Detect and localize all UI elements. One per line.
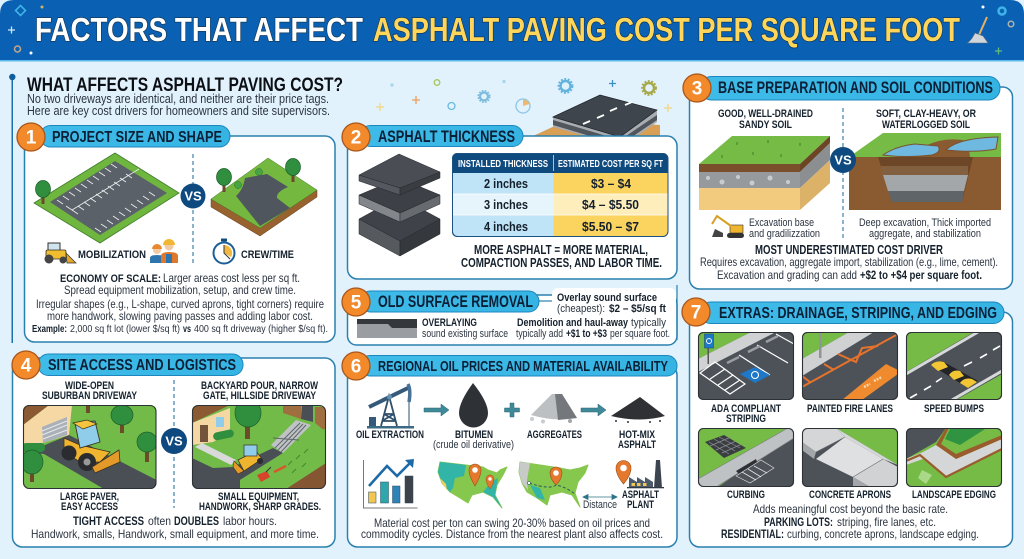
overlay price note xyxy=(557,292,666,315)
cost table: $5.50 – $7 xyxy=(582,219,639,234)
icon: excavator xyxy=(712,216,744,238)
road cutaway illustration xyxy=(533,95,660,146)
overlay price note: $2 – $5/sq ft xyxy=(609,303,666,315)
intro text xyxy=(27,91,330,118)
open driveway heading: WIDE-OPEN xyxy=(65,380,114,392)
bad soil heading: SOFT, CLAY-HEAVY, OR xyxy=(876,108,976,120)
access note: DOUBLES xyxy=(174,514,219,528)
icon: broom xyxy=(967,17,988,43)
open driveway heading xyxy=(42,380,138,402)
overlaying label: OVERLAYING xyxy=(422,317,477,329)
tile: landscape edging xyxy=(906,428,1002,501)
good soil heading xyxy=(718,108,813,131)
header decorations xyxy=(8,6,1014,54)
heading: extras xyxy=(682,298,1004,326)
label: aggregates: AGGREGATES xyxy=(527,429,582,441)
tight access heading: GATE, HILLSIDE DRIVEWAY xyxy=(203,390,317,402)
economy of scale text: Spread equipment mobilization, setup, and crew time. xyxy=(64,283,296,297)
cost table: ESTIMATED COST PER SQ FT xyxy=(558,159,663,170)
tight access heading: BACKYARD POUR, NARROW xyxy=(201,380,318,392)
label: asphalt plant xyxy=(622,489,659,511)
heading: base preparation xyxy=(683,74,1000,102)
cost table: $3 – $4 xyxy=(591,176,632,191)
thickness takeaway: COMPACTION PASSES, AND LABOR TIME. xyxy=(461,255,662,270)
panel 4: site access and logistics xyxy=(12,351,335,547)
extras note: PARKING LOTS: xyxy=(764,515,833,529)
cost table xyxy=(452,153,668,237)
illustration: large parking lot xyxy=(34,153,179,243)
access note: labor hours. xyxy=(223,514,277,528)
heading: site access: SITE ACCESS AND LOGISTICS xyxy=(48,357,236,374)
tile: fire lanes xyxy=(802,332,898,415)
illustration: overlay cross-section xyxy=(357,319,417,338)
label: landscape edging: LANDSCAPE EDGING xyxy=(912,489,996,501)
access note: Handwork, smalls, Handwork, small equipment, and more time. xyxy=(31,527,319,541)
cost driver note: Excavation and grading can add xyxy=(717,268,857,282)
cost table: INSTALLED THICKNESS xyxy=(458,159,548,170)
label: distance: Distance xyxy=(583,499,617,511)
bad soil heading: WATERLOGGED SOIL xyxy=(882,119,970,131)
header banner xyxy=(0,0,1024,62)
heading: site access: 4 xyxy=(21,356,32,376)
icon: stopwatch xyxy=(214,238,234,264)
extras note: RESIDENTIAL: xyxy=(721,527,784,541)
icon: aggregates pile xyxy=(530,394,577,424)
good soil caption: Excavation base xyxy=(749,217,814,229)
intro block xyxy=(27,75,343,118)
illustration: waterlogged soil pit xyxy=(849,133,1001,210)
vs divider: VS xyxy=(834,153,852,168)
label: speed bumps: SPEED BUMPS xyxy=(924,403,984,415)
heading: asphalt thickness xyxy=(342,123,523,151)
label: hot-mix asphalt: ASPHALT xyxy=(618,439,656,451)
illustration: asphalt layers xyxy=(359,154,440,256)
demolition note: typically add xyxy=(516,328,563,340)
material cost note xyxy=(361,516,663,541)
map: regional prices xyxy=(438,462,507,508)
overlaying label: sound existing surface xyxy=(422,328,508,340)
tile: speed bumps xyxy=(906,332,1002,415)
panel 2: asphalt thickness xyxy=(342,123,677,279)
label: hot-mix asphalt: HOT-MIX xyxy=(619,429,656,441)
vs divider: VS xyxy=(184,188,202,204)
extras note: curbing, concrete aprons, landscape edging. xyxy=(787,527,979,541)
bad soil caption: aggregate, and stabilization xyxy=(869,228,981,240)
heading: regional oil prices: 6 xyxy=(351,356,361,378)
panel 5: old surface removal xyxy=(342,285,677,345)
icon: hot-mix pile xyxy=(611,397,665,423)
illustration: well-drained soil block xyxy=(699,136,830,210)
icon: loader xyxy=(44,243,76,264)
heading: regional oil prices xyxy=(342,352,677,380)
bad soil caption: Deep excavation, Thick imported xyxy=(859,217,991,229)
cost table: 3 inches xyxy=(484,197,528,212)
title xyxy=(35,11,960,48)
economy of scale text: ECONOMY OF SCALE: xyxy=(60,273,161,285)
background decorations xyxy=(376,79,672,113)
economy of scale text: vs xyxy=(183,324,191,335)
label: curbing: CURBING xyxy=(727,489,765,501)
economy of scale text xyxy=(32,271,328,335)
panel 6: regional oil prices and material availability xyxy=(342,352,677,547)
icon: plus xyxy=(504,403,520,417)
panel 1: project size and shape xyxy=(17,123,335,342)
heading: project size xyxy=(17,123,230,151)
access note: often xyxy=(148,514,171,528)
overlay price note: Overlay sound surface xyxy=(557,292,657,304)
demolition note xyxy=(516,317,670,340)
access note xyxy=(31,514,319,541)
access note: TIGHT ACCESS xyxy=(73,514,144,528)
label: hot-mix asphalt xyxy=(618,429,656,451)
bad soil caption xyxy=(859,217,991,240)
extras note: Adds meaningful cost beyond the basic rate. xyxy=(753,502,948,516)
thickness takeaway: MORE ASPHALT = MORE MATERIAL, xyxy=(474,242,648,257)
tight access caption: SMALL EQUIPMENT, xyxy=(218,491,299,503)
label: bitumen: BITUMEN xyxy=(455,429,493,441)
good soil caption xyxy=(749,217,820,240)
tight access heading xyxy=(201,380,318,402)
arrow: distance xyxy=(583,494,617,500)
extras note xyxy=(721,502,979,541)
heading: asphalt thickness: 2 xyxy=(351,128,361,148)
economy of scale text: 2,000 sq ft lot (lower $/sq ft) xyxy=(70,324,180,335)
illustration: irregular lot xyxy=(211,158,317,236)
thickness takeaway xyxy=(461,242,662,270)
heading: old surface removal: 5 xyxy=(351,292,362,314)
economy of scale text: more handwork, slowing paving passes and adding labor cost. xyxy=(47,309,313,323)
tile: curbing xyxy=(698,428,794,501)
material cost note: commodity cycles. Distance from the nearest plant also affects cost. xyxy=(361,527,663,541)
title: FACTORS THAT AFFECT xyxy=(35,11,363,48)
heading: extras: 7 xyxy=(691,302,701,324)
demolition note: per square foot. xyxy=(610,328,670,340)
label: mobilization: MOBILIZATION xyxy=(78,249,146,261)
open driveway caption xyxy=(60,491,119,513)
good soil heading: SANDY SOIL xyxy=(739,119,792,131)
intro heading: WHAT AFFECTS ASPHALT PAVING COST? xyxy=(27,75,343,96)
economy of scale text: Larger areas cost less per sq ft. xyxy=(163,271,300,285)
label: oil extraction: OIL EXTRACTION xyxy=(356,429,424,441)
cost table: 4 inches xyxy=(484,219,528,234)
panel 7: extras xyxy=(682,298,1012,547)
label: crew time: CREW/TIME xyxy=(241,249,294,261)
bad soil heading xyxy=(876,108,976,131)
cost driver note: +$2 to +$4 per square foot. xyxy=(860,268,982,282)
good soil caption: and gradilizzation xyxy=(749,228,820,240)
label: fire lanes: PAINTED FIRE LANES xyxy=(807,403,893,415)
tight access caption xyxy=(199,491,321,513)
label: ada: ADA COMPLIANT xyxy=(711,403,781,415)
arrow xyxy=(424,404,449,416)
demolition note: +$1 to +$3 xyxy=(566,328,607,340)
heading: regional oil prices: REGIONAL OIL PRICES AND MATERIAL AVAILABILITY xyxy=(378,358,668,375)
icon: workers xyxy=(150,239,178,263)
panel 3: base preparation and soil conditions xyxy=(683,74,1012,289)
intro text: No two driveways are identical, and neither are their price tags. xyxy=(27,91,329,106)
demolition note: Demolition and haul-away xyxy=(517,317,629,329)
overlaying label xyxy=(422,317,508,340)
economy of scale text: 400 sq ft driveway (higher $/sq ft). xyxy=(194,324,328,335)
icon: oil pump jack xyxy=(367,384,414,428)
map: distance to plant xyxy=(519,462,588,507)
heading: old surface removal: OLD SURFACE REMOVAL xyxy=(378,292,533,311)
vs divider xyxy=(161,380,187,508)
chart: price trend xyxy=(364,459,418,508)
label: concrete aprons: CONCRETE APRONS xyxy=(809,489,891,501)
illustration: open driveway xyxy=(21,405,157,489)
heading: site access xyxy=(12,351,243,379)
icon: asphalt plant xyxy=(616,460,664,488)
heading: project size: 1 xyxy=(26,128,37,148)
material cost note: Material cost per ton can swing 20-30% based on oil prices and xyxy=(374,516,650,530)
heading: asphalt thickness: ASPHALT THICKNESS xyxy=(378,127,515,146)
cost table: 2 inches xyxy=(484,176,528,191)
heading: old surface removal xyxy=(342,288,539,316)
tight access caption: HANDWORK, SHARP GRADES. xyxy=(199,501,321,513)
heading: project size: PROJECT SIZE AND SHAPE xyxy=(52,129,222,146)
economy of scale text: Example: xyxy=(32,324,67,335)
icon: bitumen drop xyxy=(459,383,488,427)
heading: base preparation: 3 xyxy=(692,78,702,100)
extras note: striping, fire lanes, etc. xyxy=(837,515,936,529)
vs divider: VS xyxy=(165,434,183,449)
good soil heading: GOOD, WELL-DRAINED xyxy=(718,108,813,120)
economy of scale text: Irregular shapes (e.g., L-shape, curved aprons, tight corners) require xyxy=(36,297,324,311)
illustration: tight hillside access xyxy=(192,399,326,489)
open driveway caption: EASY ACCESS xyxy=(61,501,118,513)
vs divider xyxy=(830,108,856,240)
open driveway caption: LARGE PAVER, xyxy=(60,491,119,503)
overlay price note: (cheapest): xyxy=(557,303,605,315)
intro text: Here are key cost drivers for homeowners and site supervisors. xyxy=(27,103,330,118)
label: asphalt plant: PLANT xyxy=(627,499,654,511)
cost driver note: MOST UNDERESTIMATED COST DRIVER xyxy=(755,242,943,257)
label: bitumen: (crude oil derivative) xyxy=(433,439,514,451)
vs divider xyxy=(180,154,206,263)
arrow xyxy=(581,404,606,416)
timeline line xyxy=(9,74,16,343)
open driveway heading: SUBURBAN DRIVEWAY xyxy=(42,390,138,402)
tile: ada striping xyxy=(698,332,794,425)
cost driver note xyxy=(700,242,998,282)
label: bitumen xyxy=(433,429,514,451)
label: asphalt plant: ASPHALT xyxy=(622,489,659,501)
cost table: $4 – $5.50 xyxy=(582,197,639,212)
demolition note: typically xyxy=(631,317,666,329)
label: ada xyxy=(711,403,781,425)
label: ada: STRIPING xyxy=(726,413,766,425)
tile: concrete aprons xyxy=(802,428,898,501)
